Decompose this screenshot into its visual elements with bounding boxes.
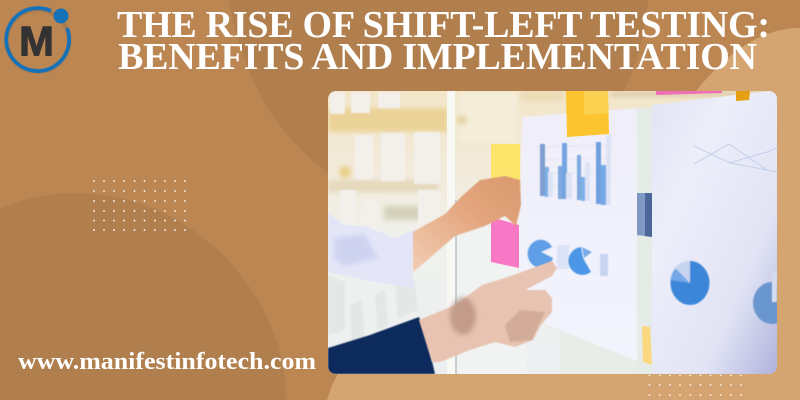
photo background [328,91,777,374]
dot grid: left [93,180,186,231]
strip yellow sticky [642,326,652,365]
pie chart: right edge [752,272,777,324]
centre paper [519,108,640,362]
strip blue [637,193,652,237]
logo shadow ring [7,10,69,72]
top pink note [656,91,722,95]
upper arm and hand [413,176,521,272]
bar group 2 [558,143,572,199]
right background panel [457,200,520,228]
title line 2: BENEFITS AND IMPLEMENTATION [118,36,757,78]
pink sticky [491,217,519,268]
pie chart: centre paper [568,247,608,276]
logo letter: M [19,18,54,64]
pointing hand [419,261,557,362]
top orange sticky [566,91,609,137]
pie chart: pointing target [528,240,569,269]
background shape: lower left dark blob [0,193,286,400]
background shape: right light blob [327,28,800,400]
navy jacket sleeve [328,317,435,374]
background shape: top dark blob [229,0,648,178]
sleeve: white shirt [328,213,416,288]
right paper [652,91,777,374]
strip between papers [637,108,652,374]
pie chart: large [670,261,710,305]
yellow sticky [491,144,520,186]
title [117,4,770,78]
hand shadow [450,297,476,335]
glass pillar [447,91,457,374]
logo blue dot [54,8,68,24]
blurred gold bokeh [328,91,775,220]
glass pillar white strip [447,91,455,374]
strip pale [637,108,652,374]
dot grid: bottom right [649,375,742,396]
paper bottom reflection [560,331,640,374]
bar gridlines [533,145,610,186]
sleeve folds [334,234,378,266]
photo: analysts pointing at charts [328,91,791,374]
bar group 1 [540,144,553,197]
top sticky highlight [584,91,608,115]
logo [6,8,69,72]
logo blue ring [6,8,69,71]
bar chart [533,135,611,205]
glass pillar edge [455,200,457,374]
finger shadow [505,310,545,342]
bar group 3 [577,155,590,201]
line chart [694,144,777,172]
strip navy [645,193,652,237]
bar group 4 [596,135,611,205]
frosted glass pattern [328,276,417,340]
small orange tab [736,91,750,101]
website url: www.manifestinfotech.com [18,348,316,375]
blurred white panels [330,92,440,234]
title line 1: THE RISE OF SHIFT-LEFT TESTING: [117,4,770,46]
